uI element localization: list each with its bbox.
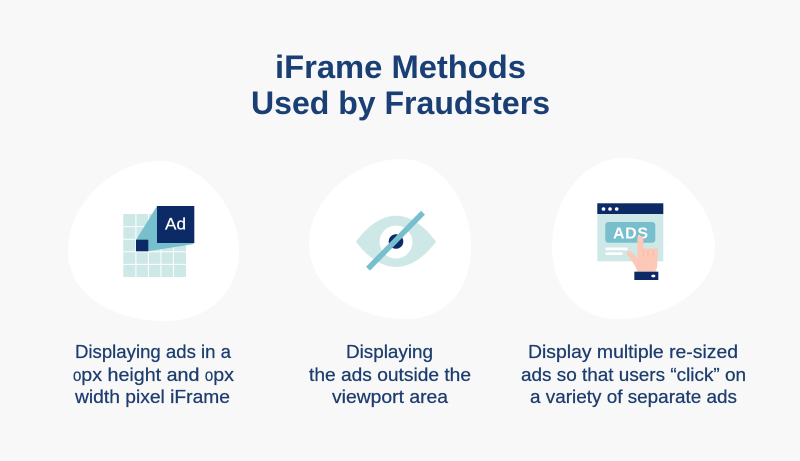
text: right caption: Display multiple re-sized [528, 341, 738, 362]
text: right caption [521, 341, 746, 407]
title: iFrame Methods [275, 49, 526, 85]
blob background: right [552, 158, 715, 319]
title: Used by Fraudsters [251, 85, 550, 121]
text: left caption: Displaying ads in a [75, 341, 232, 362]
text: right caption: ads so that users “click” on [521, 364, 746, 385]
icon: ad over pixel grid: Ad [165, 214, 186, 234]
blob background: left [68, 161, 239, 321]
blob background: centre [309, 159, 471, 319]
title [251, 49, 550, 121]
text: centre caption [309, 341, 471, 407]
panel: multiple re-sized ads [521, 158, 746, 407]
text: centre caption: viewport area [332, 386, 449, 407]
text: right caption: a variety of separate ads [530, 386, 737, 407]
panel: outside the viewport [309, 159, 471, 407]
text: left caption: width pixel iFrame [74, 386, 230, 407]
text: left caption: 0px height and 0px [73, 364, 235, 385]
icon: browser window with ADS and clicking hand: ADS [613, 226, 648, 242]
text: left caption [73, 341, 235, 407]
text: centre caption: Displaying [346, 341, 433, 362]
icon: crossed-out eye [356, 213, 436, 269]
panel: zero-pixel iFrame [68, 161, 239, 407]
text: centre caption: the ads outside the [309, 364, 471, 385]
icon: browser window with ADS and clicking hand [597, 203, 663, 280]
icon: ad over pixel grid [123, 206, 194, 277]
